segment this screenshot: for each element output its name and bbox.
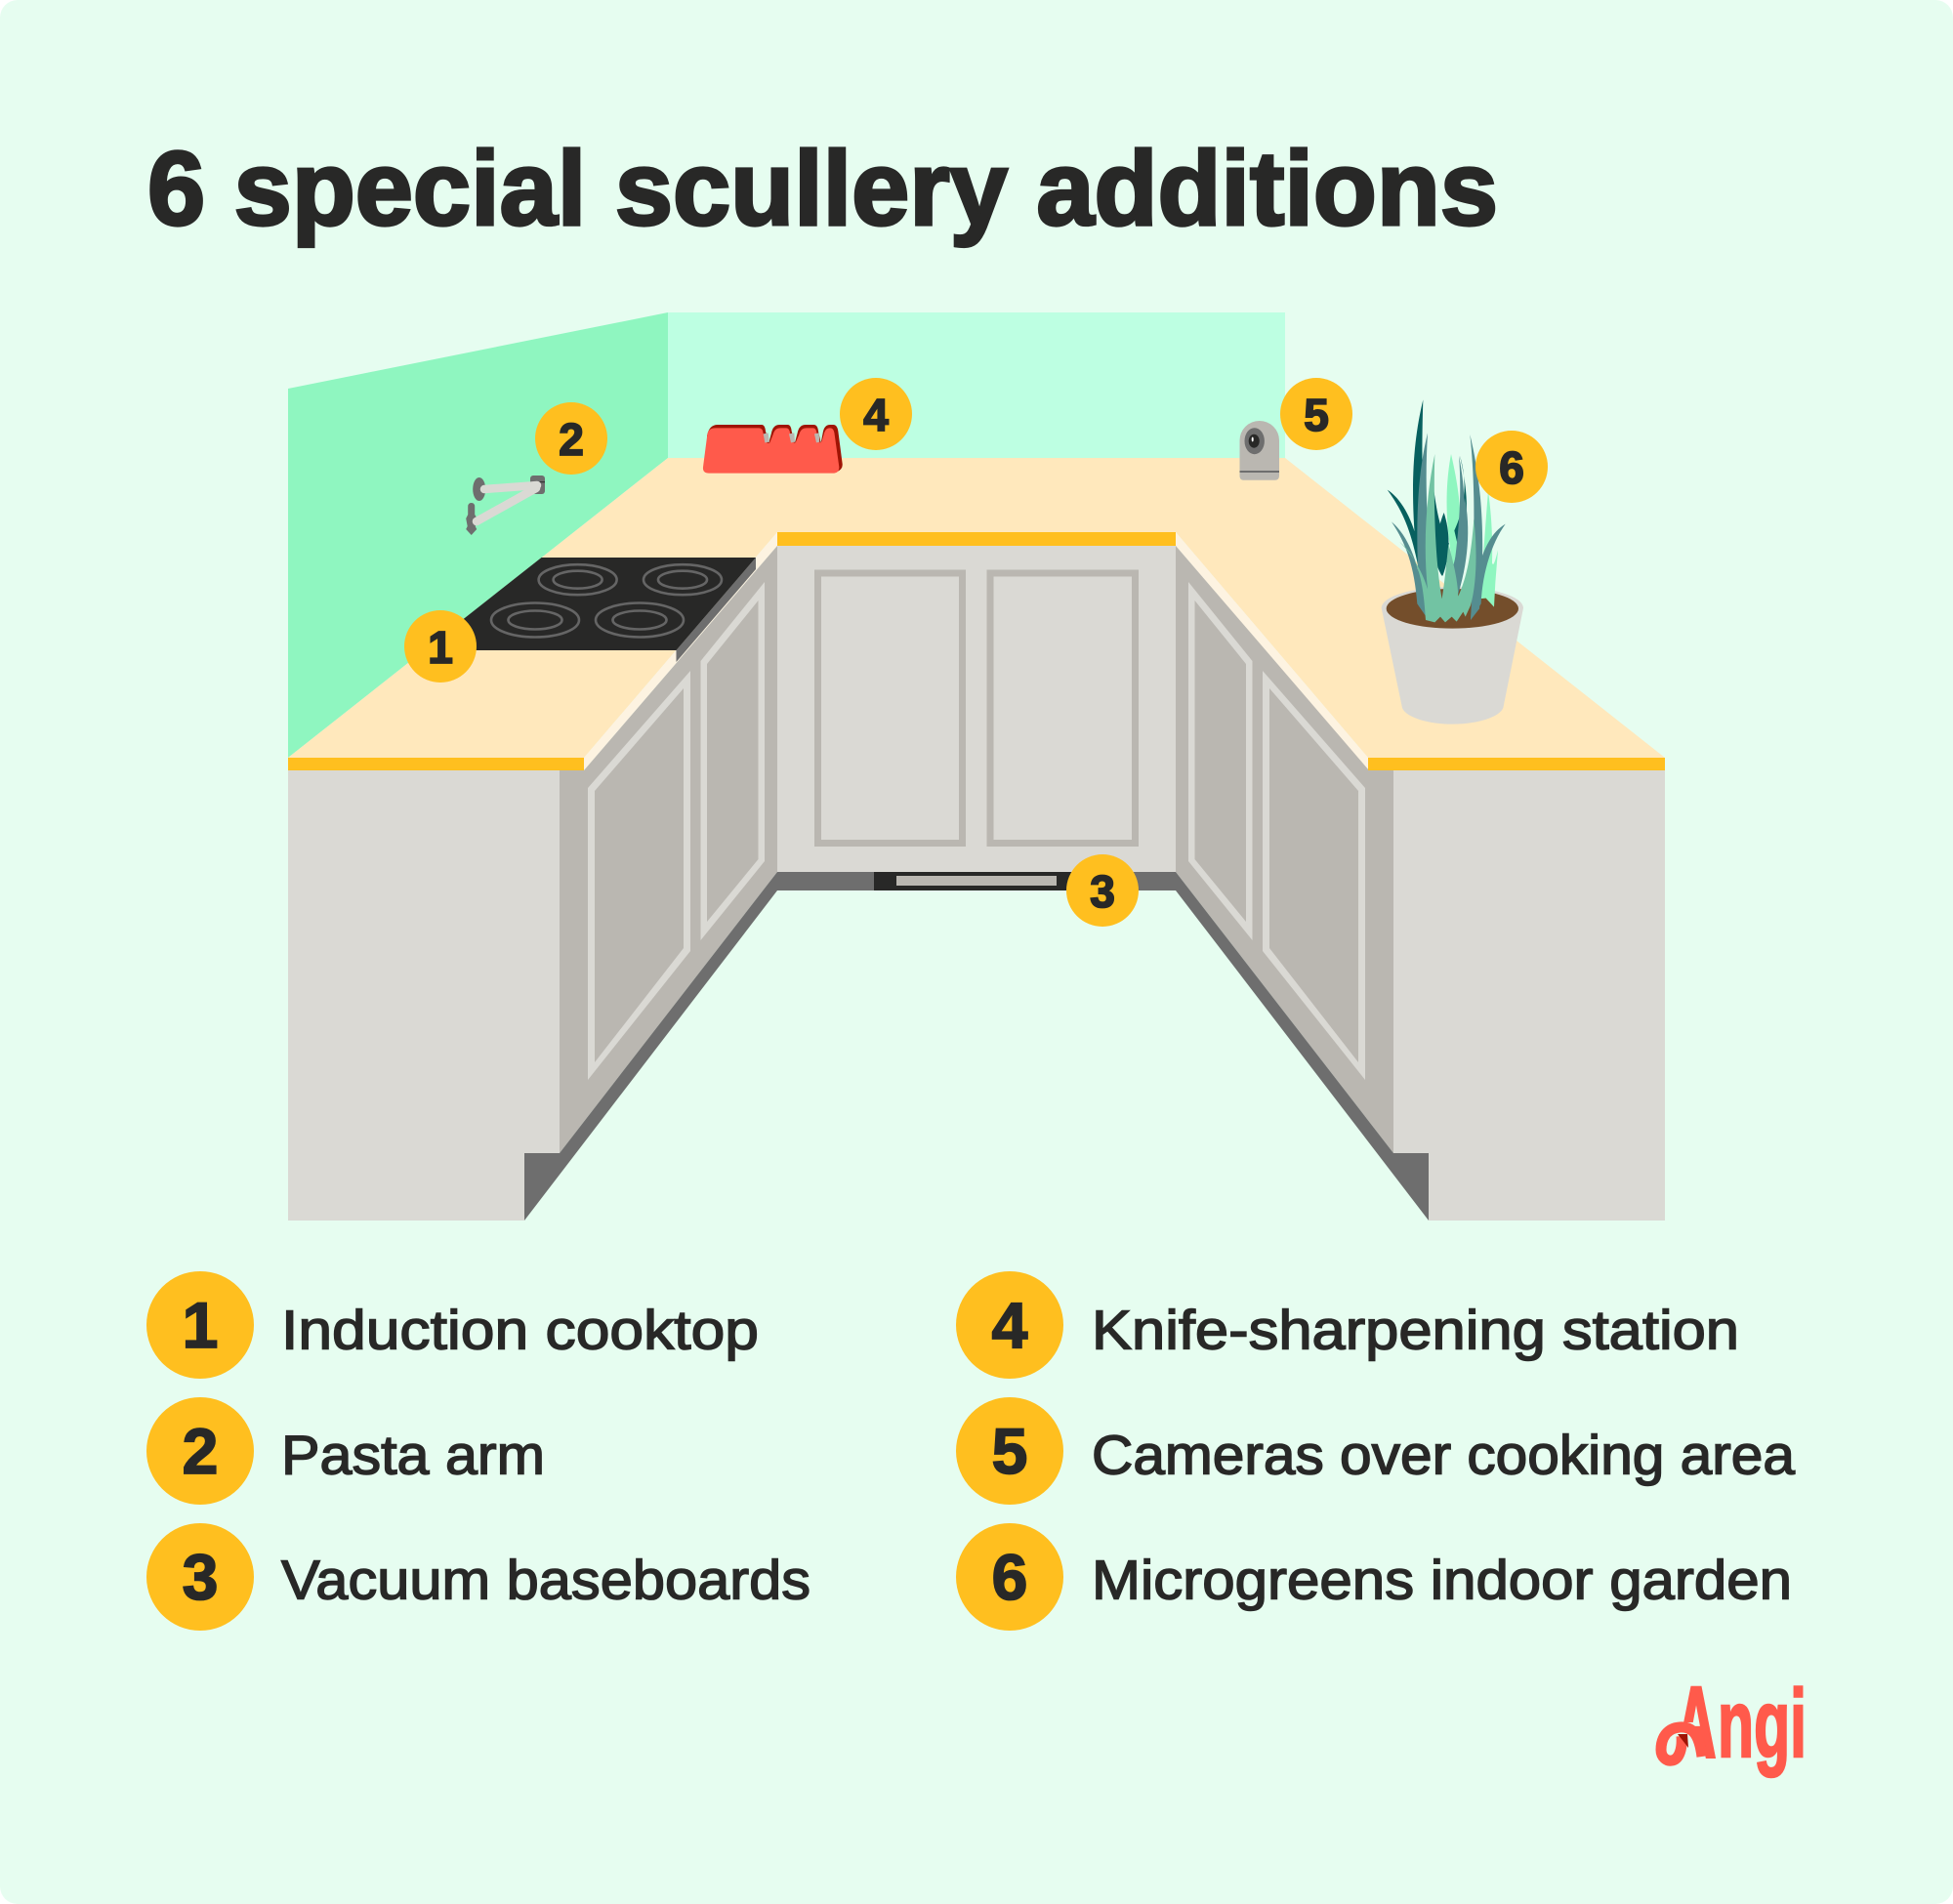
legend item 3: 3 (183, 1541, 218, 1613)
marker 5 (1280, 378, 1352, 450)
Angi logo (1656, 1685, 1803, 1779)
legend item 1: Induction cooktop (281, 1299, 759, 1361)
soil (1387, 589, 1518, 629)
dark leaves (1388, 399, 1467, 576)
potted microgreens (1382, 399, 1523, 724)
marker 3 (1066, 854, 1139, 927)
Angi logo: A (1677, 1667, 1716, 1778)
marker 2: 2 (559, 414, 584, 465)
legend item 6: Microgreens indoor garden (1092, 1549, 1792, 1611)
left side cabinet wall (560, 546, 777, 1153)
legend item 1: 1 (183, 1289, 218, 1361)
center toe kick (777, 872, 1176, 890)
vacuum baseboard (874, 872, 1079, 890)
countertop (288, 458, 1665, 758)
back leaves (1447, 454, 1498, 607)
Angi logo: ngi (1718, 1670, 1807, 1777)
legend item 2: Pasta arm (281, 1424, 545, 1486)
marker 3: 3 (1090, 866, 1115, 917)
legend item 5 (956, 1397, 1795, 1505)
left toe kick (524, 872, 777, 1221)
legend item 4 (956, 1271, 1739, 1379)
marker 2 (535, 402, 607, 475)
legend item 5: Cameras over cooking area (1092, 1424, 1795, 1486)
right side cabinet wall (1176, 546, 1393, 1153)
legend item 3: Vacuum baseboards (281, 1549, 810, 1611)
left front cabinet (288, 770, 560, 1221)
marker 1 (404, 610, 477, 683)
legend item 3 (146, 1523, 810, 1631)
title: 6 special scullery additions (147, 129, 1498, 247)
front mint leaves (1399, 454, 1476, 622)
marker 1: 1 (428, 622, 453, 673)
counter front strips (288, 532, 1665, 770)
legend item 5: 5 (992, 1415, 1027, 1487)
marker 5: 5 (1304, 390, 1329, 440)
marker 6 (1475, 431, 1548, 503)
left wall (288, 312, 668, 758)
legend item 2: 2 (183, 1415, 218, 1487)
center cabinet (777, 546, 1176, 872)
marker 4 (840, 378, 912, 450)
mid teal leaves (1392, 433, 1506, 620)
legend item 4: 4 (992, 1289, 1028, 1361)
legend item 1 (146, 1271, 759, 1379)
right front cabinet (1393, 770, 1665, 1221)
back wall (668, 312, 1285, 458)
camera (1240, 421, 1279, 480)
kitchen illustration (288, 312, 1665, 1221)
legend item 2 (146, 1397, 545, 1505)
left cabinet doors (588, 582, 765, 1080)
right cabinet doors (1188, 582, 1365, 1080)
counter inner edges (584, 532, 1368, 770)
legend item 4: Knife-sharpening station (1092, 1299, 1739, 1361)
pasta arm (466, 476, 545, 535)
marker 4: 4 (863, 390, 889, 440)
pot (1382, 587, 1523, 724)
knife sharpening station (703, 425, 843, 474)
right toe kick (1176, 872, 1429, 1221)
marker 6: 6 (1499, 442, 1524, 493)
induction cooktop (424, 558, 756, 662)
center cabinet doors (818, 573, 1135, 844)
legend item 6 (956, 1523, 1792, 1631)
legend item 6: 6 (992, 1541, 1027, 1613)
